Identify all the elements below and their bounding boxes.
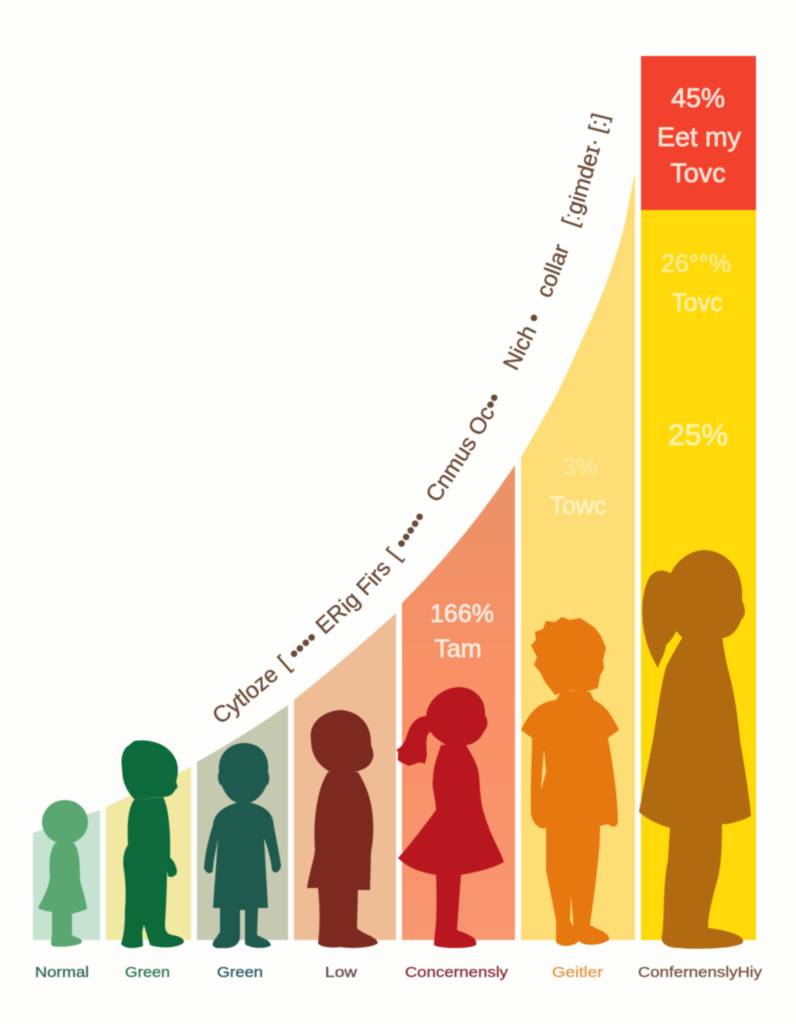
curved caption along rising curve: Cytloze: [213, 669, 278, 722]
value: 26°°% Tovc: 26°°%: [661, 250, 731, 278]
category labels: Low: [325, 965, 358, 981]
column 1: normal: [33, 800, 100, 947]
curved caption along rising curve: [ːgimdeɪ· [:]: [560, 112, 614, 229]
category labels: Green: [125, 965, 170, 981]
bar 6: [521, 173, 635, 940]
curved caption along rising curve: [213, 112, 614, 722]
category labels: [35, 965, 763, 981]
value: 25%: 25%: [668, 419, 728, 452]
bar 5: [402, 465, 515, 940]
category labels: Geitler: [552, 965, 603, 981]
column 5: concernensly: [396, 465, 515, 948]
silhouette: child in tunic: [307, 710, 378, 948]
silhouette: child side view: [121, 740, 184, 948]
value: 3% Towc: Towc: [550, 492, 606, 520]
value: 166% Tam: 166%: [430, 600, 494, 628]
curved caption along rising curve: Cnmus Oc••: [426, 394, 498, 501]
value: 45% Eet my Tovc: 45%: [671, 83, 725, 113]
curved caption along rising curve: collar: [539, 243, 569, 298]
value: 45% Eet my Tovc: Eet my: [657, 122, 742, 152]
value: 3% Towc: 3%: [563, 454, 597, 481]
silhouette: child in shorts: [204, 743, 281, 948]
bar 7 yellow: [641, 210, 756, 940]
curved caption along rising curve: [ •••••: [384, 512, 424, 564]
bar 3: [197, 705, 288, 940]
bar 2: [106, 767, 191, 940]
column 7: confernenslyhiy: [639, 56, 756, 949]
bar 1: [33, 810, 100, 940]
column 3: green: [197, 705, 288, 948]
column 4: low: [294, 613, 396, 948]
value: 166% Tam: Tam: [434, 635, 482, 663]
column 6: geitler: [521, 173, 635, 946]
category labels: Green: [217, 965, 263, 981]
value: 3% Towc: [550, 454, 606, 520]
silhouette: girl with ponytail in red dress: [396, 687, 504, 948]
column 2: green: [106, 740, 191, 948]
curved caption along rising curve: [ ••••: [276, 634, 316, 674]
category labels: ConfernenslyHiy: [638, 965, 763, 981]
silhouette: tall girl with ponytail: [639, 550, 751, 949]
silhouette: toddler in dress: [38, 800, 88, 947]
silhouette: curly-haired child: [521, 617, 619, 946]
bar 4: [294, 613, 396, 940]
category labels: Concernensly: [405, 965, 509, 981]
value: 45% Eet my Tovc: Tovc: [670, 158, 726, 188]
bar 7 red cap: [641, 56, 756, 210]
value: 166% Tam: [430, 600, 494, 663]
curved caption along rising curve: ERig Firs: [314, 562, 391, 635]
curved caption along rising curve: Nich •: [502, 314, 538, 371]
value: 45% Eet my Tovc: [657, 83, 742, 188]
category labels: Normal: [35, 965, 89, 981]
value: 26°°% Tovc: Tovc: [671, 289, 723, 317]
value: 26°°% Tovc: [661, 250, 731, 317]
